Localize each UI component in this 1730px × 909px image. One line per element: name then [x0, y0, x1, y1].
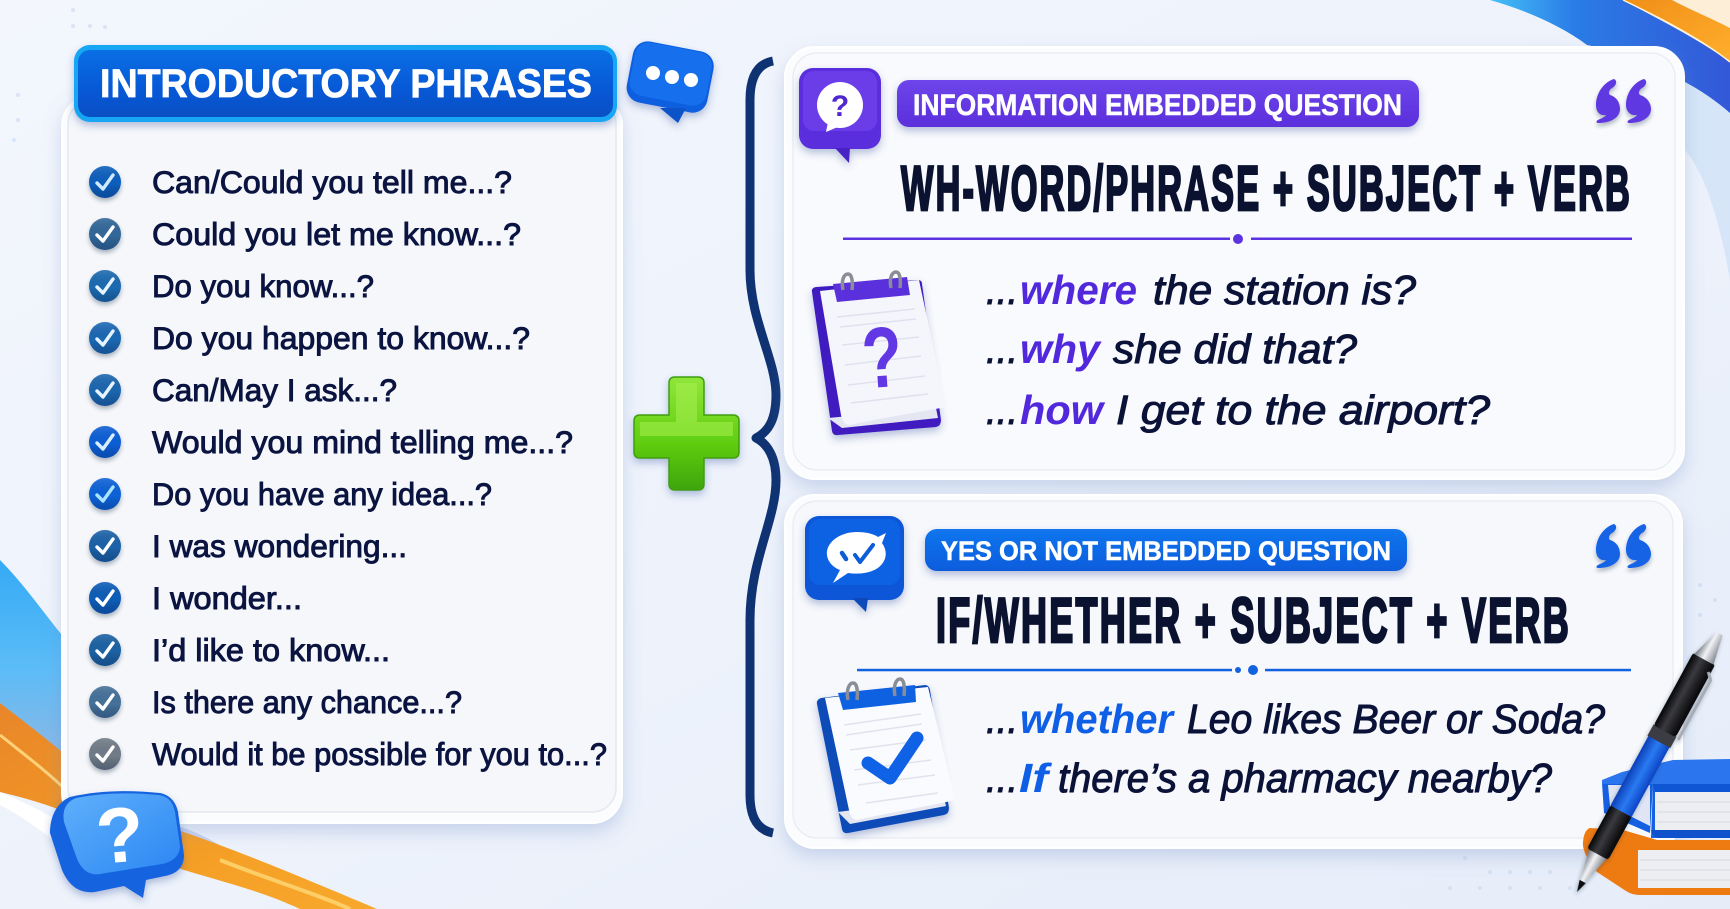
list row 5: Can/May I ask...?: [152, 372, 397, 408]
blue book: [1602, 759, 1730, 838]
divider with dots: [857, 665, 1631, 675]
list row 3: Do you know...?: [152, 268, 374, 304]
panel background: [785, 495, 1682, 848]
title banner: [74, 45, 617, 122]
example: whether: Leo likes Beer or Soda?: [1187, 696, 1605, 742]
panel background: [785, 47, 1684, 479]
icon: quotation marks: [1596, 79, 1651, 123]
example: how: I get to the airport?: [1116, 387, 1490, 433]
example: whether: [986, 696, 1605, 742]
list row 7: Do you have any idea...?: [152, 476, 492, 512]
example: whether: ...: [986, 696, 1018, 742]
list row 4: Do you happen to know...?: [152, 320, 530, 356]
decorative swoosh: bottom left: [0, 560, 377, 909]
list row 1: Can/Could you tell me...?: [152, 164, 512, 200]
panel background: [62, 96, 622, 823]
icon: stacked books: [1583, 759, 1730, 895]
example: where: [986, 267, 1416, 313]
list row 2: Could you let me know...?: [152, 216, 521, 252]
example: how: how: [1020, 387, 1106, 433]
example: where: the station is?: [1153, 267, 1416, 313]
list row 9: [89, 580, 302, 616]
example: why: why: [1020, 326, 1102, 372]
list row 12: Would it be possible for you to...?: [152, 736, 607, 772]
panel: yes or not embedded question: [785, 495, 1682, 848]
icon: blue check bubble: [805, 516, 904, 612]
example sentences: [986, 696, 1605, 801]
pill label: [925, 529, 1407, 571]
example: why: she did that?: [1113, 326, 1357, 372]
icon: notepad with checkmark: [817, 679, 955, 833]
example: why: [986, 326, 1357, 372]
panel: information embedded question: [785, 47, 1684, 479]
list row 6: Would you mind telling me...?: [152, 424, 573, 460]
icon: notepad with question mark: [812, 272, 946, 435]
orange book: [1583, 828, 1730, 895]
plus sign: [634, 377, 739, 490]
title banner: INTRODUCTORY PHRASES: [100, 62, 592, 106]
example: how: [986, 387, 1490, 433]
list row 9: I wonder...: [152, 580, 302, 616]
pill label: [897, 80, 1419, 127]
example: if: ...: [986, 755, 1018, 801]
pill label: INFORMATION EMBEDDED QUESTION: [913, 89, 1402, 122]
example sentences: [986, 267, 1490, 433]
icon: chat bubble with dots: [624, 39, 716, 123]
decorative swoosh: top right: [1490, 0, 1730, 280]
example: whether: whether: [1020, 696, 1175, 742]
curly brace: [750, 61, 776, 833]
panel: introductory phrases list: [62, 96, 622, 823]
icon: quotation marks: [1596, 524, 1651, 568]
list row 10: I’d like to know...: [152, 632, 390, 668]
icon: purple question bubble: ?: [831, 90, 849, 123]
icon: pen: [1566, 627, 1730, 900]
example: how: ...: [986, 387, 1018, 433]
example: if: there’s a pharmacy nearby?: [1058, 755, 1552, 801]
example: where: where: [1020, 267, 1137, 313]
list row 8: I was wondering...: [152, 528, 407, 564]
icon: notepad with question mark: ?: [859, 309, 906, 407]
list row 11: Is there any chance...?: [152, 684, 462, 720]
icon: question bubble: ?: [92, 789, 148, 881]
divider with dot: [843, 234, 1632, 244]
icon: question bubble: [50, 789, 184, 898]
pill label: YES OR NOT EMBEDDED QUESTION: [941, 536, 1391, 566]
example: why: ...: [986, 326, 1018, 372]
example: where: ...: [986, 267, 1018, 313]
example: if: If: [1019, 755, 1053, 801]
icon: purple question bubble: [799, 68, 881, 163]
